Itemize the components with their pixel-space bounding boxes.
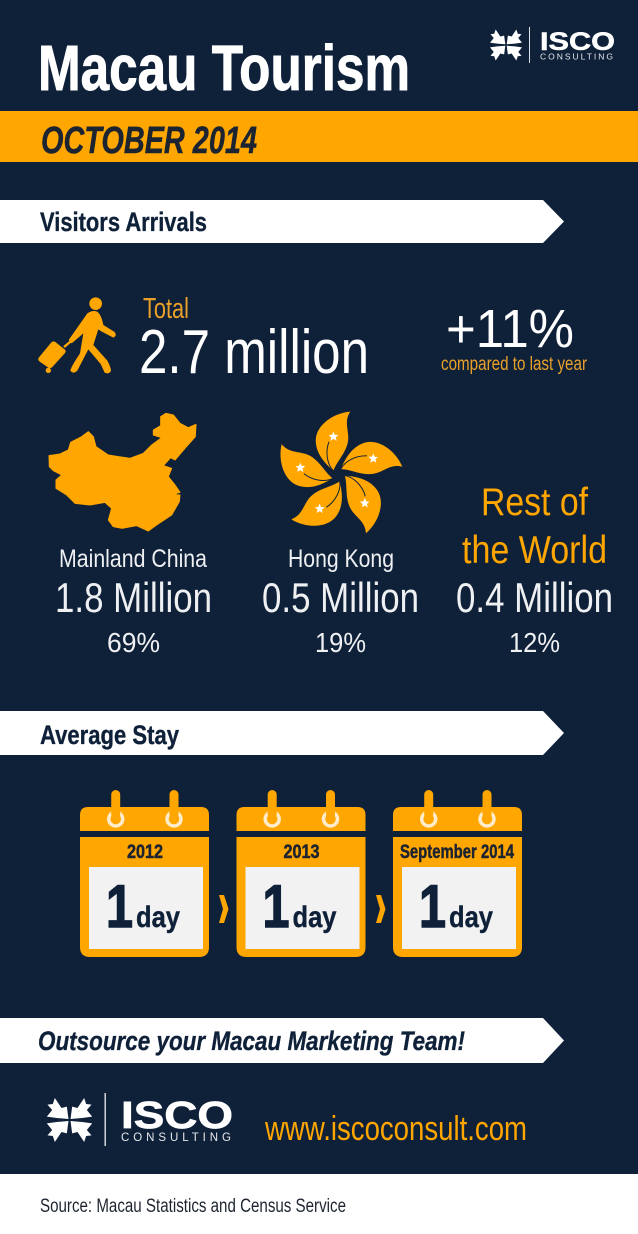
calendar: 2012: 2012 [127, 842, 163, 863]
icon: traveller with suitcase [38, 297, 116, 373]
calendar: September 2014: September 2014 [400, 842, 514, 863]
calendar: 2013: 2013 [284, 842, 320, 863]
logo: ISCO Consulting footer: CONSULTING [121, 1132, 231, 1144]
calendar: 2012: 1 [106, 873, 133, 940]
section banner: average stay: Average Stay [40, 720, 179, 750]
stat: Rest of the World: the World [462, 529, 607, 572]
stat: Hong Kong: 0.5 Million [262, 574, 419, 621]
growth caption: compared to last year [441, 354, 588, 375]
calendar: 2012: day [136, 901, 180, 934]
total visitors: 2.7 million [139, 318, 369, 387]
section banner: visitors arrivals [0, 200, 564, 243]
logo: ISCO Consulting footer: ISCO [121, 1095, 233, 1137]
website url: www.iscoconsult.com [264, 1110, 527, 1148]
stat: Rest of the World: 12% [509, 627, 560, 658]
stat: Mainland China: 1.8 Million [55, 574, 212, 621]
stat: Hong Kong [262, 545, 419, 658]
section banner: visitors arrivals: Visitors Arrivals [40, 207, 207, 237]
calendar: 2013: day [292, 901, 337, 934]
section banner: call to action [0, 1018, 564, 1063]
stat: Hong Kong: Hong Kong [288, 545, 394, 573]
stat: Mainland China: 69% [107, 627, 160, 658]
stat: Rest of the World [456, 481, 613, 658]
source footer: Source: Macau Statistics and Census Service [40, 1196, 346, 1217]
section banner: call to action: Outsource your Macau Marketing Team! [38, 1026, 465, 1056]
stat: Hong Kong: 19% [315, 627, 366, 658]
calendar: September 2014 [393, 790, 522, 957]
section banner: average stay [0, 711, 564, 755]
date band [0, 111, 638, 162]
calendar: September 2014: 1 [419, 873, 446, 940]
arrow: 2013 to September 2014 [376, 895, 386, 923]
title: Macau Tourism [38, 32, 410, 104]
icon: map of China [49, 413, 196, 531]
logo: ISCO Consulting header: ISCO [540, 28, 615, 56]
stat: Mainland China: Mainland China [59, 545, 207, 573]
stat: Rest of the World: Rest of [481, 481, 588, 524]
source footer [0, 1174, 638, 1234]
logo: ISCO Consulting footer [47, 1093, 233, 1146]
icon: Hong Kong bauhinia flower [271, 412, 402, 540]
calendar: 2013: 1 [262, 873, 290, 940]
calendar: September 2014: day [449, 901, 493, 934]
date band: OCTOBER 2014 [41, 120, 257, 162]
calendar: 2013 [236, 790, 366, 957]
growth figure: +11% [446, 299, 574, 359]
arrow: 2012 to 2013 [219, 895, 228, 923]
logo: ISCO Consulting header [490, 27, 615, 63]
logo: ISCO Consulting header: CONSULTING [540, 52, 613, 62]
total label: Total [143, 293, 189, 325]
stat: Mainland China [55, 545, 212, 658]
calendar: 2012 [80, 790, 209, 957]
